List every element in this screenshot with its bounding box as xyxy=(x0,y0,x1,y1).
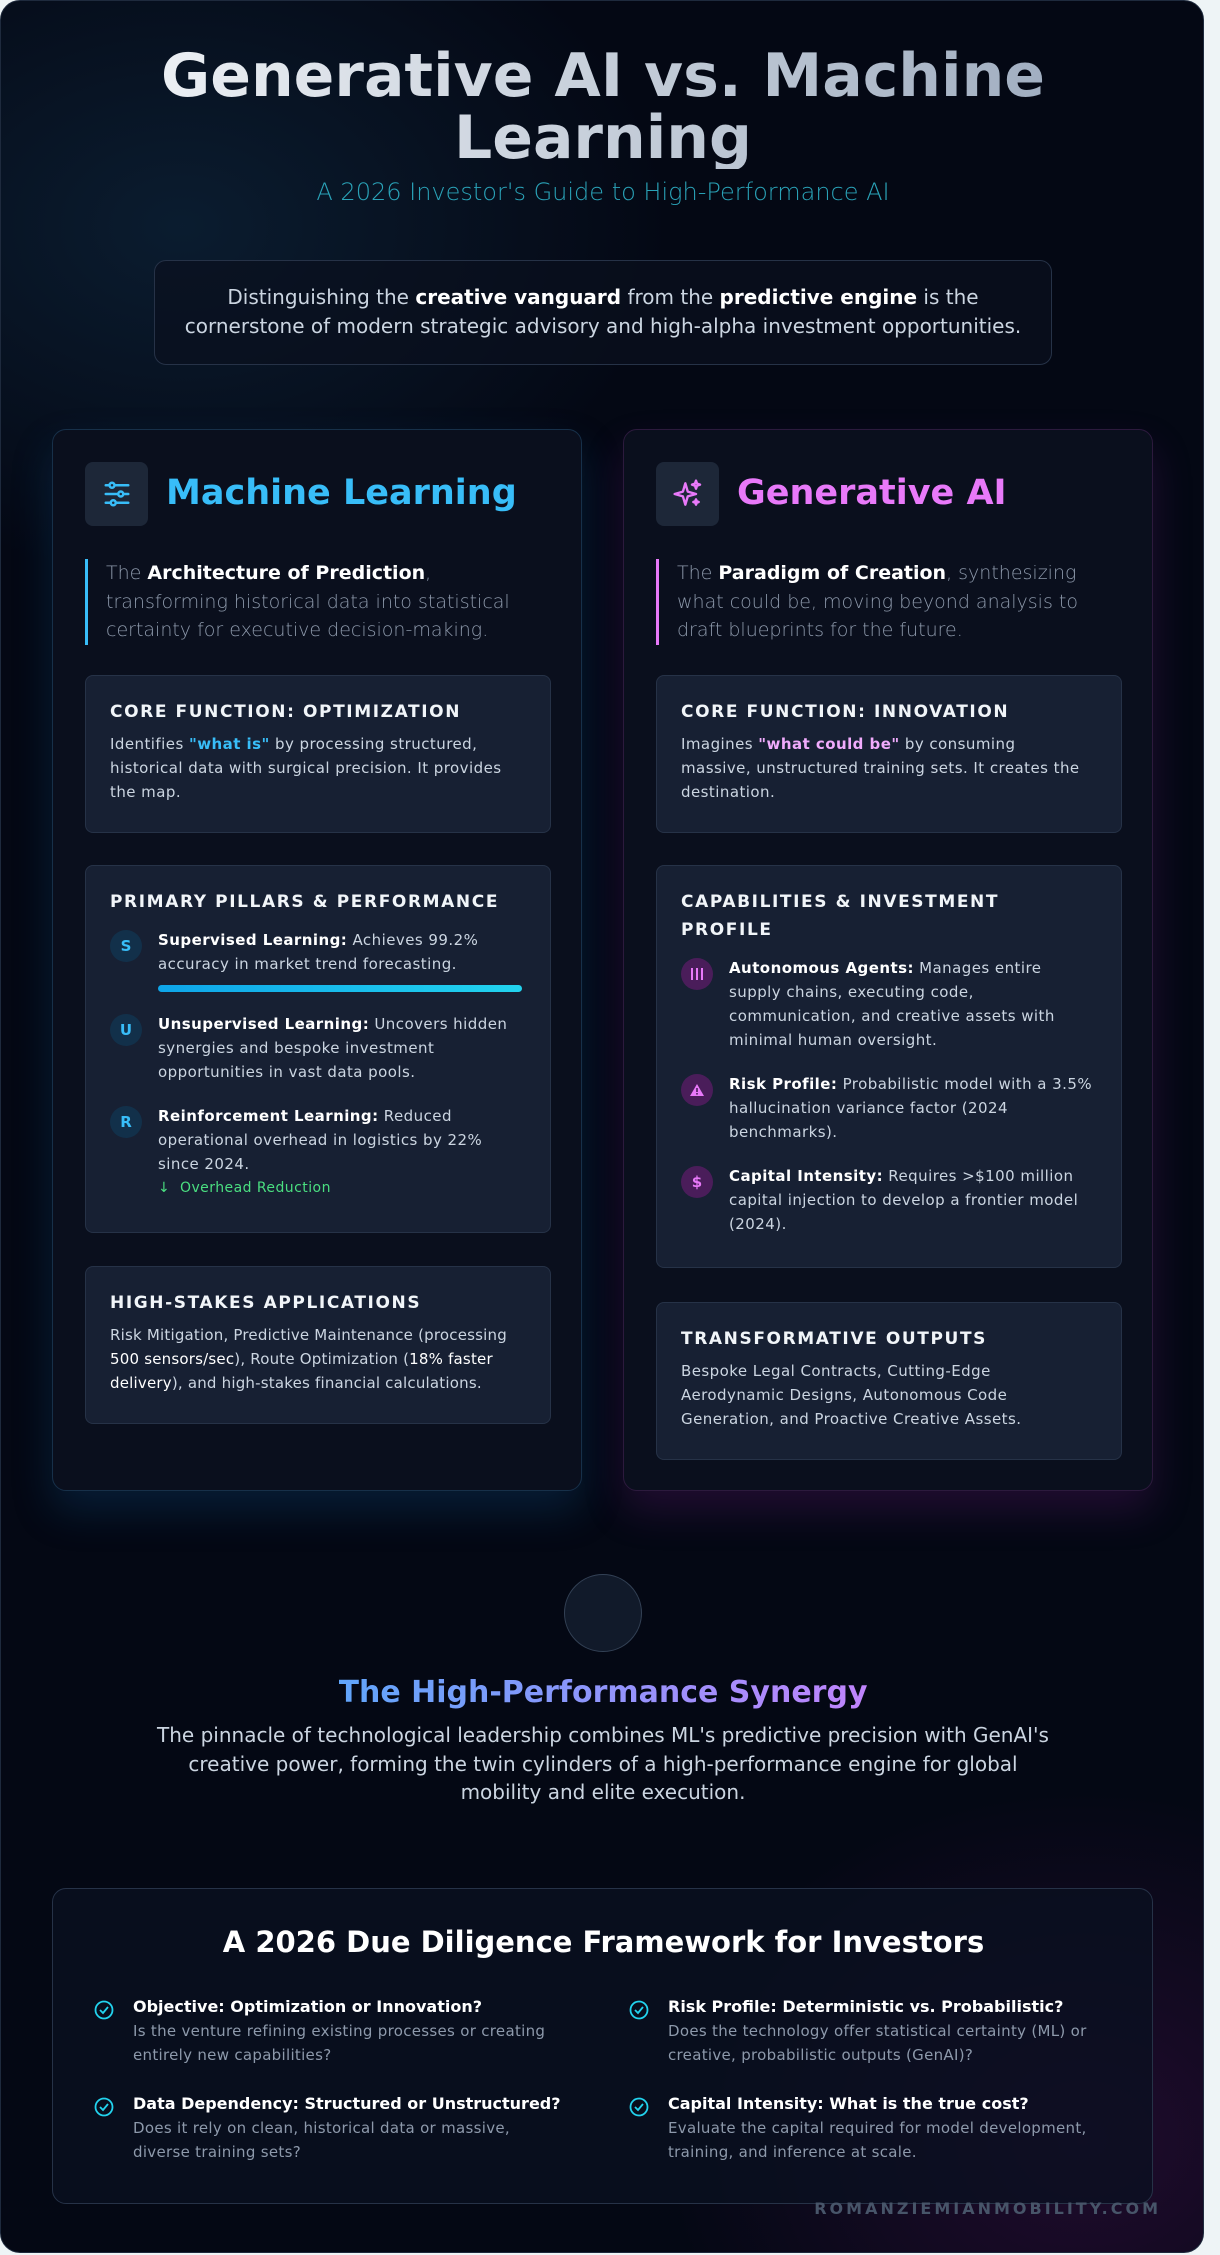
quote: paradigm of creation: The Paradigm of Creation, synthesizing what could be, moving beyond analysis to draft blueprints for the future. xyxy=(677,562,1078,641)
heading: synergy: The High-Performance Synergy xyxy=(338,1675,868,1710)
card: core function innovation xyxy=(656,675,1122,833)
icon: sliders xyxy=(85,462,148,526)
heading: generative ai: Generative AI xyxy=(737,473,1007,513)
intro text box xyxy=(154,260,1052,365)
progress bar xyxy=(158,985,522,992)
card: transformative outputs: Bespoke Legal Contracts, Cutting-Edge Aerodynamic Designs, Autonomous Code Generation, and Proactive Creative Assets. xyxy=(681,1362,1022,1428)
item: objective xyxy=(94,1997,545,2064)
card: capabilities: CAPABILITIES & INVESTMENT PROFILE xyxy=(681,892,999,940)
item: data dependency: diverse training sets? xyxy=(133,2143,301,2161)
text: synergy description: The pinnacle of technological leadership combines ML's predictive precision with GenAI's creative power, forming the twin cylinders of a high-performance engine for global mobility and elite execution. xyxy=(157,1723,1049,1804)
item: objective: Is the venture refining existing processes or creating entirely new capabilities? xyxy=(133,2022,545,2064)
card: high-stakes applications: Risk Mitigation, Predictive Maintenance (processing 500 sensors/sec), Route Optimization (18% faster delivery), and high-stakes financial calculations. xyxy=(110,1326,507,1392)
item: capital intensity xyxy=(630,2094,1087,2161)
card: high-stakes applications xyxy=(85,1266,551,1424)
intro text box: cornerstone of modern strategic advisory and high-alpha investment opportunities. xyxy=(185,314,1021,338)
pillar: reinforcement: ↓ Overhead Reduction xyxy=(158,1180,331,1196)
heading: framework: A 2026 Due Diligence Framework for Investors xyxy=(223,1925,984,1959)
pillar: reinforcement: R xyxy=(120,1113,132,1131)
pillar: unsupervised: Unsupervised Learning: Uncovers hidden synergies and bespoke investment opportunities in vast data pools. xyxy=(158,1015,507,1081)
intro text box: Distinguishing the creative vanguard from the predictive engine is the xyxy=(227,285,979,309)
item: data dependency: Does it rely on clean, historical data or massive, xyxy=(133,2119,510,2137)
subtitle: A 2026 Investor's Guide to High-Performance AI xyxy=(316,178,890,206)
item: risk profile: Does the technology offer statistical certainty (ML) or creative, probabilistic outputs (GenAI)? xyxy=(668,2022,1087,2064)
pillar: reinforcement: Reinforcement Learning: Reduced operational overhead in logistics by 22% since 2024. xyxy=(158,1107,482,1173)
capability: capital intensity: Capital Intensity: Requires >$100 million capital injection to develop a frontier model (2024). xyxy=(729,1167,1078,1233)
card: core function innovation: Imagines "what could be" by consuming xyxy=(681,735,1015,753)
card: primary pillars: PRIMARY PILLARS & PERFORMANCE xyxy=(110,892,499,912)
card: capabilities xyxy=(656,865,1122,1268)
pillar: supervised: Supervised Learning: Achieves 99.2% accuracy in market trend forecasting. xyxy=(158,931,478,973)
pillar: unsupervised: U xyxy=(120,1021,132,1039)
icon: sparkles xyxy=(656,462,719,526)
card: high-stakes applications: HIGH-STAKES APPLICATIONS xyxy=(110,1293,421,1313)
title xyxy=(1,45,1205,169)
pillar: reinforcement xyxy=(110,1106,482,1196)
item: risk profile: Risk Profile: Deterministic vs. Probabilistic? xyxy=(668,1997,1063,2016)
item: data dependency xyxy=(94,2094,561,2161)
title: Generative AI vs. Machine xyxy=(161,41,1045,111)
item: data dependency: Data Dependency: Structured or Unstructured? xyxy=(133,2094,561,2113)
card: transformative outputs xyxy=(656,1302,1122,1460)
icon: synergy circle xyxy=(564,1574,642,1652)
card: primary pillars xyxy=(85,865,551,1233)
footer: website: ROMANZIEMIANMOBILITY.COM xyxy=(814,2199,1161,2218)
title: Learning xyxy=(454,103,752,173)
card: core function innovation: massive, unstructured training sets. It creates the destination. xyxy=(681,759,1080,801)
panel: due diligence framework xyxy=(52,1888,1153,2204)
panel: machine learning xyxy=(52,429,582,1491)
pillar: supervised: S xyxy=(121,937,131,955)
item: capital intensity: Capital Intensity: What is the true cost? xyxy=(668,2094,1029,2113)
capability: capital intensity: $ xyxy=(692,1173,702,1191)
card: core function optimization: Identifies "what is" by processing structured, historical data with surgical precision. It provides the map. xyxy=(110,735,502,801)
quote: architecture of prediction: The Architecture of Prediction, transforming historical data into statistical certainty for executive decision-making. xyxy=(106,562,510,641)
heading: machine learning: Machine Learning xyxy=(166,473,517,513)
capability: autonomous agents: Autonomous Agents: Manages entire supply chains, executing code, communication, and creative assets with minimal human oversight. xyxy=(729,959,1055,1049)
card: core function innovation: CORE FUNCTION: INNOVATION xyxy=(681,702,1009,722)
card: core function optimization xyxy=(85,675,551,833)
card: core function optimization: CORE FUNCTION: OPTIMIZATION xyxy=(110,702,461,722)
panel: generative ai xyxy=(623,429,1153,1491)
item: capital intensity: Evaluate the capital required for model development, training, and inference at scale. xyxy=(668,2119,1087,2161)
item: risk profile xyxy=(630,1997,1087,2064)
capability: risk profile: Risk Profile: Probabilistic model with a 3.5% hallucination variance factor (2024 benchmarks). xyxy=(729,1075,1092,1141)
card: transformative outputs: TRANSFORMATIVE OUTPUTS xyxy=(681,1329,987,1349)
item: objective: Objective: Optimization or Innovation? xyxy=(133,1997,482,2016)
pillar: supervised xyxy=(110,930,522,992)
